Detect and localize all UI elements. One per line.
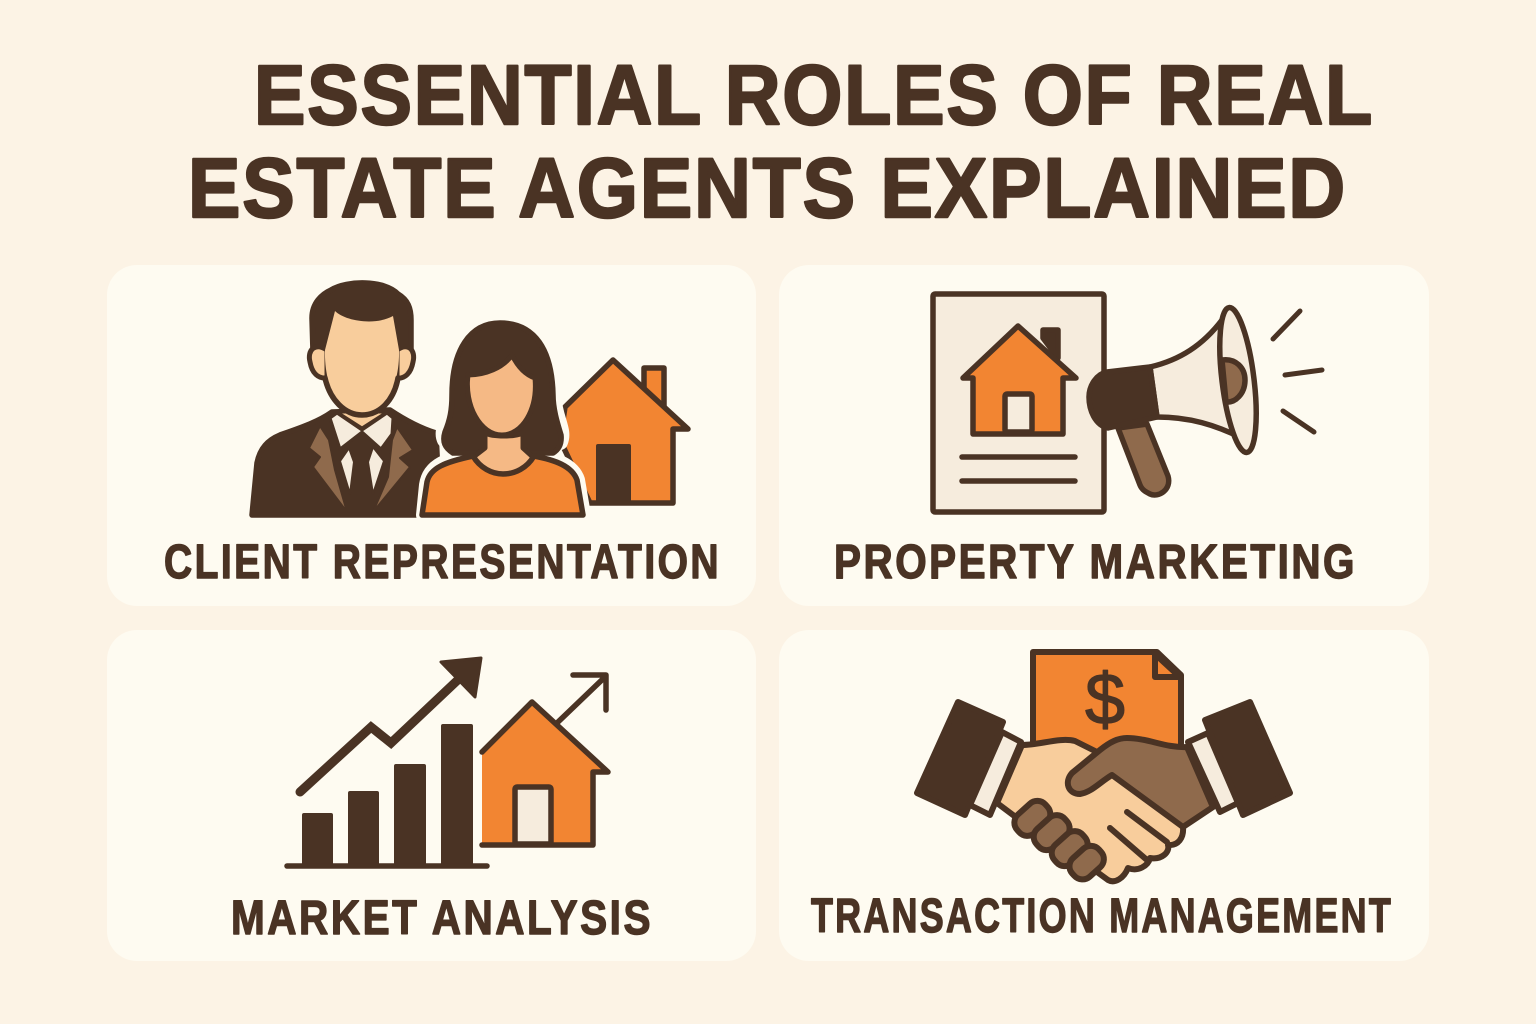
panel: market analysis	[107, 630, 756, 961]
icon: house with arrow	[482, 675, 608, 845]
icon: handshake and contract	[917, 652, 1290, 884]
label: MARKET ANALYSIS	[231, 892, 653, 945]
icon: right sleeve	[1188, 702, 1290, 815]
bar chart	[287, 724, 487, 866]
icon: listing flyer and megaphone	[933, 294, 1322, 512]
title: ESSENTIAL ROLES OF REAL	[254, 48, 1374, 142]
panel: client representation	[107, 265, 756, 606]
icon: rising chart and house	[287, 658, 608, 866]
icon: light hand	[997, 740, 1183, 881]
label: PROPERTY MARKETING	[834, 536, 1357, 589]
icon: dollar document	[1033, 652, 1181, 760]
label: CLIENT REPRESENTATION	[164, 536, 721, 589]
icon: man, woman and house	[252, 283, 688, 515]
icon: dollar document: $	[1085, 660, 1125, 740]
panel: transaction management	[779, 630, 1429, 961]
icon: brown hand	[1010, 738, 1213, 884]
icon: man in suit	[252, 283, 440, 515]
panel: property marketing	[779, 265, 1429, 606]
icon: sound rays	[1273, 311, 1322, 432]
title: ESTATE AGENTS EXPLAINED	[188, 141, 1347, 235]
icon: left sleeve	[917, 702, 1021, 815]
icon: woman	[422, 323, 583, 515]
title	[188, 48, 1374, 235]
icon: megaphone	[1089, 306, 1263, 495]
icon: house behind clients	[560, 360, 688, 503]
arrow: growth trend	[300, 658, 481, 792]
icon: flyer	[933, 294, 1104, 512]
